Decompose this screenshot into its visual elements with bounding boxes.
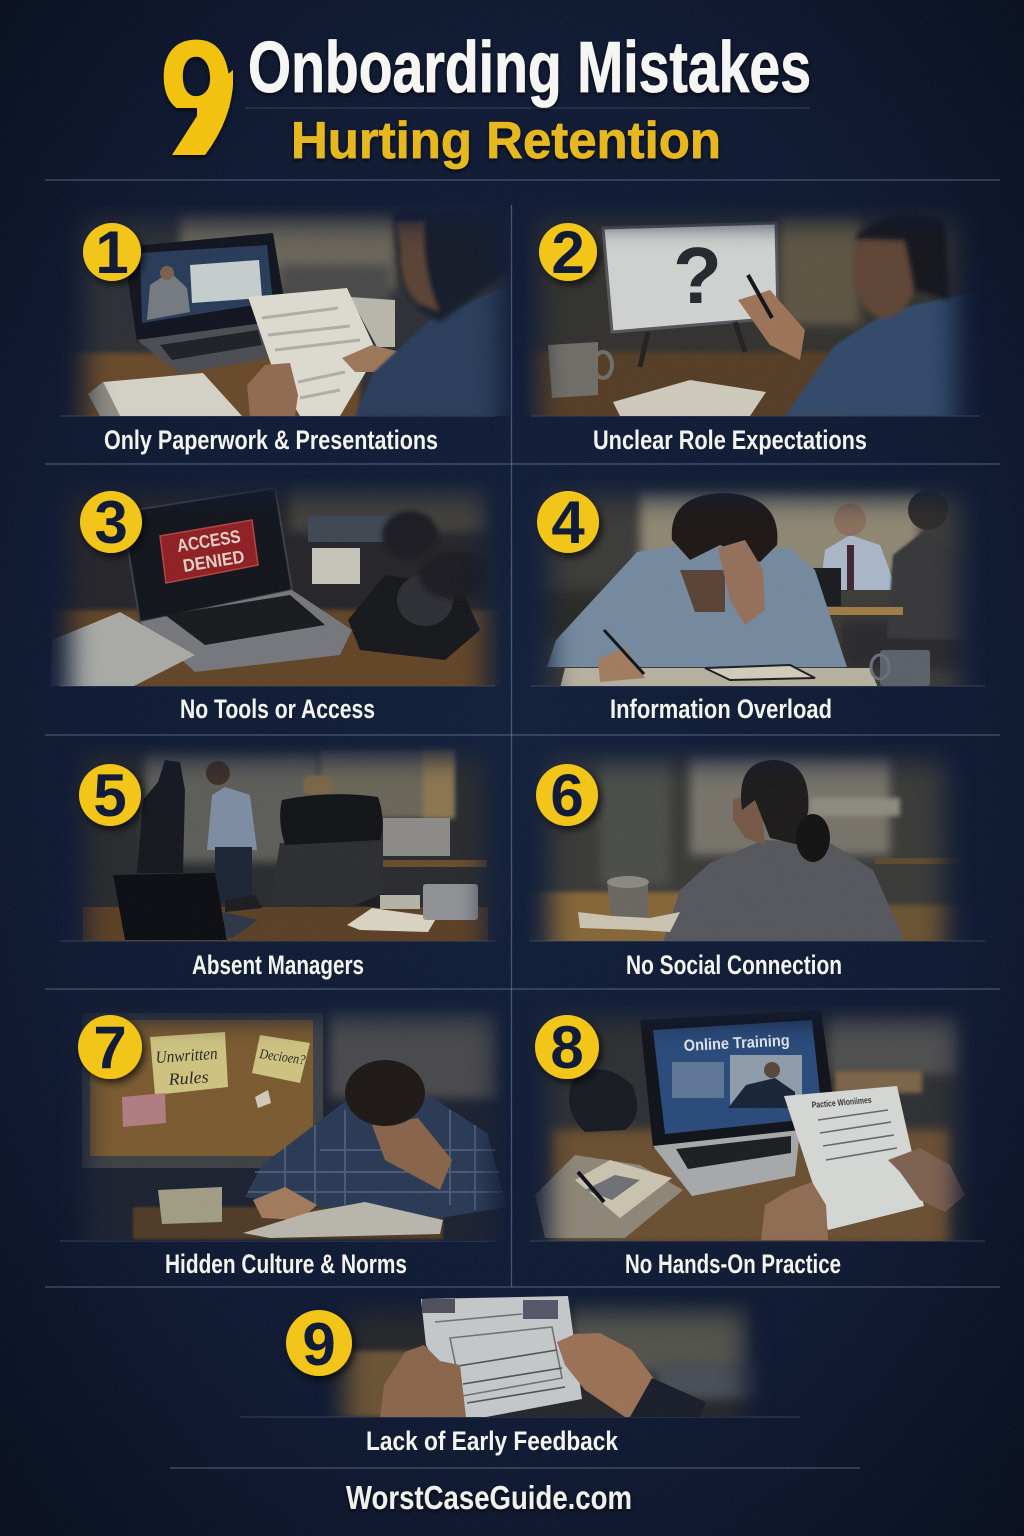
worksheet	[784, 1086, 924, 1230]
sticky note: decision: Decioen?	[258, 1047, 306, 1068]
badge 8	[535, 1014, 599, 1081]
scene: isolated employee	[532, 750, 961, 941]
badge 5: 5	[93, 762, 127, 829]
form	[421, 1296, 582, 1417]
sticky note: unwritten rules: Rules	[167, 1067, 210, 1089]
caption 3: No Tools or Access	[180, 694, 375, 724]
scene: corkboard and frustrated employee	[76, 1008, 503, 1241]
badge 5	[79, 762, 141, 829]
hands	[380, 1333, 706, 1417]
title	[162, 39, 810, 173]
scene: online training laptop and worksheet	[525, 1005, 975, 1245]
panel 8: no hands-on practice	[525, 1005, 975, 1279]
sticky note: unwritten rules: Unwritten	[155, 1044, 218, 1067]
scene: access denied laptop: DENIED	[181, 546, 246, 576]
title line 2: Hurting Retention	[291, 112, 721, 170]
caption 8: No Hands-On Practice	[625, 1249, 841, 1279]
scene: access denied laptop: ACCESS	[175, 526, 242, 556]
caption 7: Hidden Culture & Norms	[165, 1249, 407, 1279]
badge 9: 9	[302, 1311, 336, 1378]
caption 2: Unclear Role Expectations	[593, 425, 867, 455]
caption 6: No Social Connection	[626, 950, 842, 980]
panel 1: only paperwork and presentations	[60, 205, 512, 455]
panel 4: information overload	[537, 486, 971, 718]
sticky note: decision	[252, 1035, 310, 1083]
sticky note: unwritten rules	[150, 1032, 228, 1095]
badge 7	[78, 1014, 142, 1081]
panel 5: absent managers	[55, 745, 505, 980]
badge 4: 4	[551, 489, 585, 556]
panel 7: hidden culture and norms	[76, 1008, 503, 1274]
caption 1: Only Paperwork & Presentations	[104, 425, 438, 455]
footer url: WorstCaseGuide.com	[346, 1479, 632, 1516]
panel 2: unclear role expectations	[525, 205, 985, 455]
badge 2: 2	[551, 219, 585, 286]
badge 6	[536, 762, 598, 829]
caption 9: Lack of Early Feedback	[366, 1426, 619, 1456]
scene: empty manager chair	[55, 745, 505, 945]
badge 9	[286, 1310, 352, 1378]
badge 3: 3	[94, 489, 128, 556]
scene: access denied laptop	[50, 478, 505, 690]
badge 1: 1	[95, 219, 129, 286]
badge 8: 8	[550, 1014, 584, 1081]
title number 9	[162, 40, 234, 158]
scene: question mark board	[525, 205, 985, 420]
badge 1	[83, 219, 141, 286]
badge 7: 7	[93, 1014, 127, 1081]
caption 5: Absent Managers	[192, 950, 364, 980]
caption 4: Information Overload	[610, 694, 832, 724]
scene: desk background	[329, 1300, 758, 1417]
title number 9: 9	[159, 8, 235, 184]
panel 6: no social connection	[532, 750, 961, 974]
badge 4	[537, 489, 599, 556]
badge 2	[539, 219, 597, 286]
scene: question mark board: ?	[673, 231, 722, 320]
worksheet: Pactice Wioniimes	[811, 1095, 872, 1110]
scene: overwhelmed employee	[540, 486, 971, 686]
scene: laptop and paperwork	[60, 205, 512, 423]
title line 1: Onboarding Mistakes	[248, 28, 811, 108]
scene: online training laptop and worksheet: Online Training	[683, 1032, 790, 1055]
badge 6: 6	[550, 762, 584, 829]
badge 3	[80, 489, 142, 556]
panel 9: lack of early feedback	[286, 1296, 758, 1456]
panel 3: no tools or access	[50, 478, 505, 724]
